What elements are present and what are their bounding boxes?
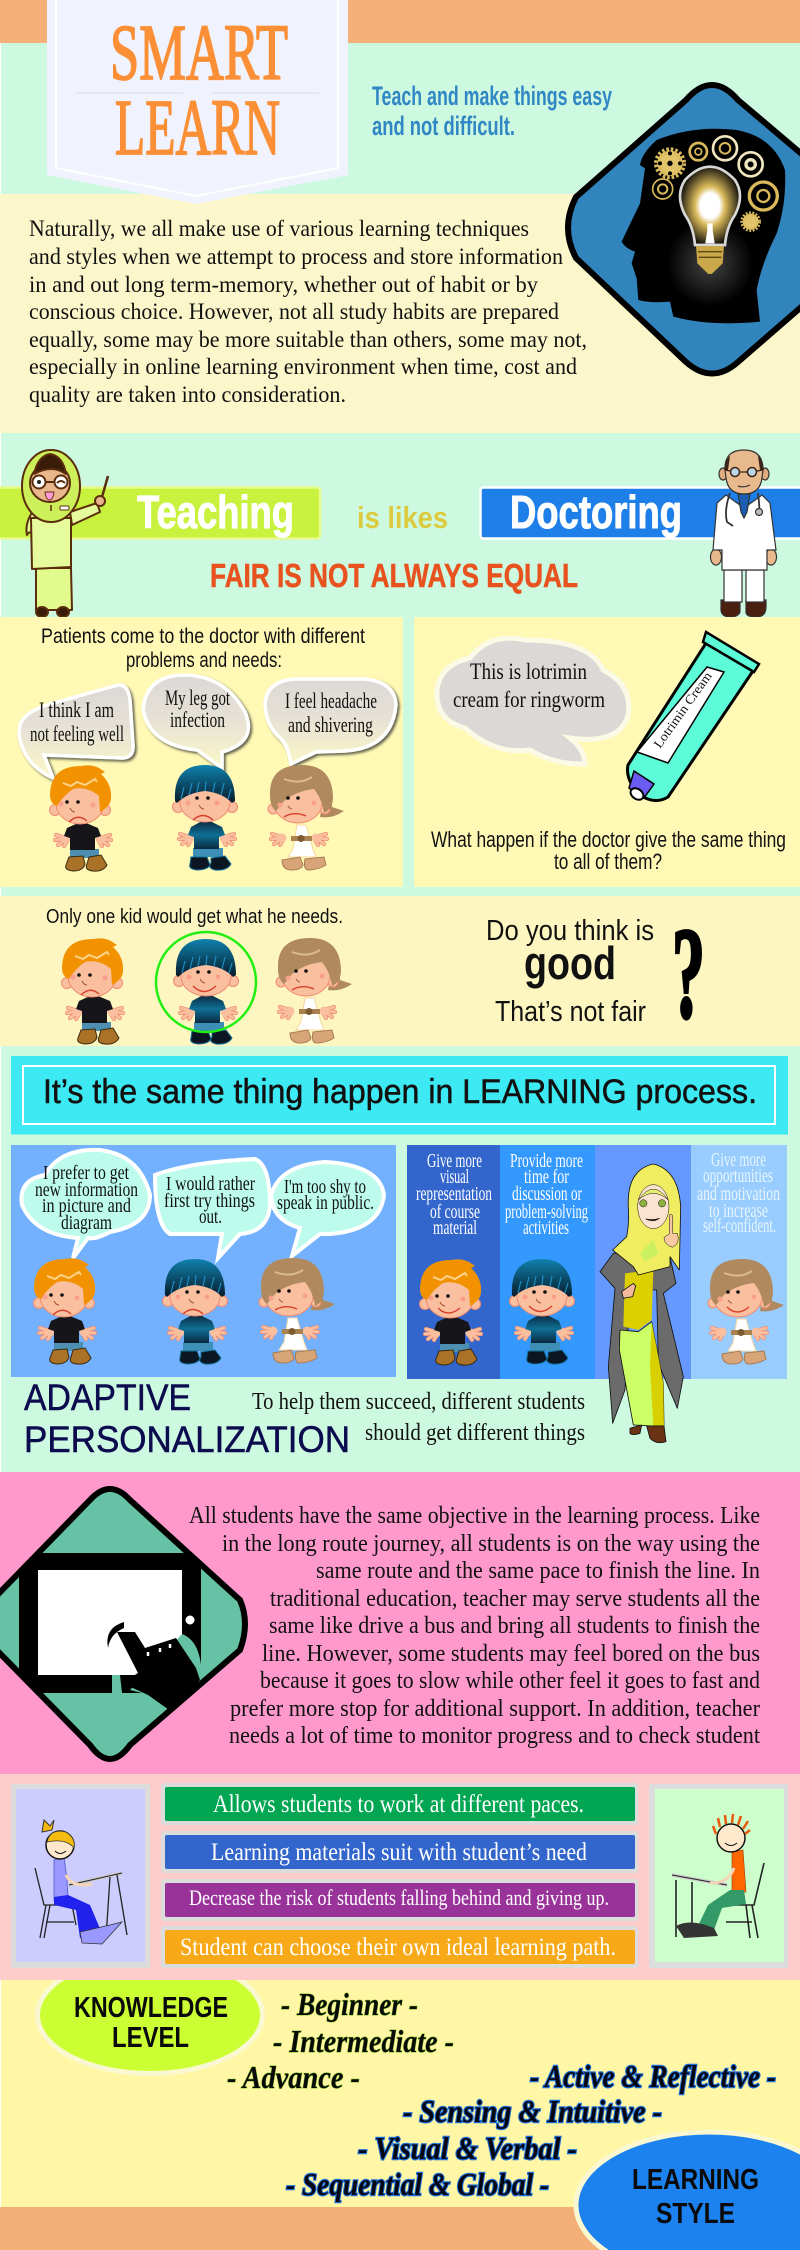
bar: risk: [165, 1883, 635, 1917]
banner: Doctoring: [480, 486, 800, 538]
intro paragraph: especially in online learning environment when time, cost and: [29, 354, 577, 379]
connector text: is likes: is likes: [357, 500, 448, 535]
speech bubble: pictures: diagram: [61, 1212, 112, 1234]
bar: materials: Learning materials suit with student’s need: [211, 1839, 587, 1866]
kid: orange hair: [50, 765, 111, 871]
speech bubble: leg infection: [143, 675, 248, 768]
list: knowledge levels: [227, 1986, 454, 2095]
text: discussion time: [505, 1150, 588, 1239]
kid: orange hair: [420, 1259, 481, 1365]
highlight circle: [156, 932, 256, 1032]
list: knowledge levels: - Intermediate -: [273, 2023, 454, 2059]
title: LEARN: LEARN: [115, 85, 280, 172]
speech bubble: headache: I feel headache: [285, 688, 377, 713]
text: visual representation: [416, 1150, 492, 1239]
list: learning styles: [286, 2058, 776, 2202]
text: same objective: All students have the same objective in the learning process. Like: [189, 1503, 760, 1529]
kid: orange hair: [62, 938, 123, 1044]
heading: adaptive personalization: [24, 1377, 350, 1460]
text: visual representation: Give more: [427, 1150, 482, 1172]
speech bubble: headache: [265, 679, 396, 764]
label: knowledge level: LEVEL: [112, 2022, 189, 2054]
title: SMART: SMART: [110, 10, 288, 97]
speech bubble: try things: first try things: [164, 1190, 255, 1212]
list: knowledge levels: - Advance -: [227, 2059, 360, 2095]
tagline: Teach and make things easy: [372, 81, 612, 111]
banner: Teaching: [0, 486, 320, 538]
kid: brown hair: [708, 1259, 784, 1364]
text: discussion time: discussion or: [512, 1183, 582, 1205]
list: learning styles: - Sequential & Global -: [286, 2166, 549, 2202]
speech bubble: headache: and shivering: [288, 712, 373, 737]
text: same objective: prefer more stop for additional support. In addition, teacher: [230, 1696, 760, 1722]
speech bubble: pictures: in picture and: [42, 1195, 131, 1217]
kid: blue hat: [172, 765, 238, 870]
panel: student needs: [11, 1145, 396, 1377]
icon: cream tube: Lotrimin Cream: [650, 669, 715, 751]
text: same objective: needs a lot of time to monitor progress and to check student: [229, 1723, 760, 1749]
text: question: to all of them?: [554, 849, 662, 874]
icon: question mark: ?: [672, 902, 705, 1046]
text: motivation: [697, 1149, 780, 1237]
bar: risk: Decrease the risk of students falling behind and giving up.: [189, 1885, 609, 1910]
speech bubble: pictures: [21, 1150, 150, 1258]
text: same objective: same route and the same pace to finish the line. In: [316, 1558, 760, 1584]
text: do you think: That’s not fair: [495, 996, 646, 1028]
card: girl student: [11, 1784, 150, 1968]
text: do you think: good: [524, 937, 616, 989]
text: same objective: in the long route journey, all students is on the way using the: [222, 1531, 760, 1557]
intro paragraph: equally, some may be more suitable than others, some may not,: [29, 327, 587, 352]
intro paragraph: in and out long term-memory, whether out of habit or by: [29, 272, 538, 297]
figure: woman teacher: [600, 1164, 683, 1443]
text: visual representation: representation: [416, 1183, 492, 1205]
speech bubble: pictures: I prefer to get: [43, 1162, 129, 1184]
panel: differentiated support: [407, 1145, 787, 1379]
text: same objective: line. However, some students may feel bored on the bus: [262, 1641, 760, 1667]
text: help them succeed: should get different things: [365, 1420, 585, 1446]
speech bubble: not feeling well: [19, 685, 133, 778]
list: learning styles: - Visual & Verbal -: [358, 2130, 577, 2166]
badge: learning style: STYLE: [656, 2198, 735, 2230]
text: visual representation: of course: [430, 1201, 480, 1223]
list: learning styles: - Sensing & Intuitive -: [403, 2093, 662, 2129]
badge: learning style: LEARNING: [632, 2164, 759, 2196]
label: knowledge level: [74, 1992, 228, 2054]
text: patients intro: problems and needs:: [126, 649, 282, 672]
panel: doctor's treatment: [414, 617, 800, 887]
text: help them succeed: To help them succeed, different students: [252, 1389, 585, 1415]
speech bubble: try things: out.: [199, 1206, 222, 1228]
banner: learning process: It’s the same thing happen in LEARNING process.: [43, 1073, 757, 1111]
intro paragraph: Naturally, we all make use of various learning techniques: [29, 216, 529, 241]
tagline: [372, 81, 612, 141]
text: help them succeed: [252, 1389, 585, 1446]
panel: only one kid: [0, 896, 800, 1046]
intro paragraph: conscious choice. However, not all study habits are prepared: [29, 299, 559, 324]
text: patients intro: [41, 625, 365, 672]
text: do you think: [486, 915, 654, 1028]
label: knowledge level: KNOWLEDGE: [74, 1992, 228, 2024]
panel: learning style: [286, 2058, 800, 2250]
intro paragraph: quality are taken into consideration.: [29, 382, 346, 407]
kid: blue hat: [162, 1259, 228, 1364]
speech bubble: try things: [155, 1159, 270, 1258]
kid: orange hair: [34, 1258, 95, 1364]
text: question: [431, 827, 786, 874]
kid: blue hat: [510, 1259, 574, 1364]
icon: cream tube: [628, 632, 759, 802]
intro paragraph: and styles when we attempt to process and store information: [29, 244, 563, 269]
heading: adaptive personalization: PERSONALIZATION: [24, 1419, 350, 1460]
kid: blue hat: [174, 939, 238, 1044]
text: do you think: Do you think is: [486, 915, 654, 947]
text: visual representation: material: [433, 1217, 477, 1239]
banner: Teaching: Teaching: [137, 486, 294, 538]
badge: learning style: [576, 2132, 800, 2250]
intro paragraph: [29, 216, 587, 407]
speech bubble: shy: [271, 1162, 384, 1256]
text: discussion time: activities: [523, 1217, 569, 1239]
text: discussion time: Provide more: [510, 1150, 583, 1172]
title banner: [47, 0, 348, 204]
speech bubble: try things: I would rather: [166, 1173, 255, 1195]
figure: doctor: [710, 450, 776, 617]
text: motivation: to increase: [709, 1200, 768, 1222]
text: discussion time: time for: [524, 1166, 569, 1188]
list: knowledge levels: - Beginner -: [281, 1986, 418, 2022]
banner: Doctoring: Doctoring: [510, 486, 682, 538]
tagline: and not difficult.: [372, 111, 515, 141]
kid: brown hair: [268, 765, 344, 870]
banner: learning process: [11, 1056, 788, 1134]
speech bubble: lotrimin: [437, 638, 629, 764]
speech bubble: pictures: new information: [35, 1179, 138, 1201]
speech bubble: leg infection: My leg got: [165, 685, 230, 710]
text: same objective: [189, 1503, 760, 1749]
icon: head with light bulb and gears: [568, 85, 800, 374]
panel: knowledge level: [35, 1980, 454, 2089]
speech bubble: shy: speak in public.: [277, 1192, 374, 1214]
heading: fair is not always equal: FAIR IS NOT ALWAYS EQUAL: [210, 557, 578, 594]
text: only one kid: Only one kid would get what he needs.: [46, 906, 343, 928]
text: motivation: Give more: [711, 1149, 766, 1171]
text: patients intro: Patients come to the doctor with different: [41, 625, 365, 648]
speech bubble: lotrimin: cream for ringworm: [453, 687, 605, 712]
speech bubble: leg infection: infection: [170, 707, 225, 732]
panel: patients: [0, 617, 403, 887]
speech bubble: not feeling well: I think I am: [39, 697, 114, 722]
bar: different paces: Allows students to work at different paces.: [213, 1791, 584, 1818]
kid: brown hair: [259, 1258, 335, 1363]
speech bubble: lotrimin: This is lotrimin: [470, 659, 587, 684]
text: visual representation: visual: [440, 1166, 469, 1188]
benefit bars: [161, 1783, 638, 1968]
bar: learning path: Student can choose their own ideal learning path.: [180, 1934, 616, 1961]
speech bubble: shy: I'm too shy to: [284, 1176, 366, 1198]
text: discussion time: problem-solving: [505, 1201, 588, 1223]
icon: tablet touch: [0, 1489, 245, 1759]
speech bubble: not feeling well: not feeling well: [30, 721, 124, 746]
text: same objective: because it goes to slow while other feel it goes to fast and: [260, 1668, 760, 1694]
card: boy student: [649, 1784, 788, 1968]
text: same objective: same like drive a bus and bring all students to finish the: [269, 1613, 760, 1639]
figure: teacher: [22, 450, 108, 617]
kid: brown hair: [276, 938, 352, 1043]
text: same objective: traditional education, teacher may serve students all the: [270, 1586, 760, 1612]
heading: adaptive personalization: ADAPTIVE: [24, 1377, 191, 1418]
